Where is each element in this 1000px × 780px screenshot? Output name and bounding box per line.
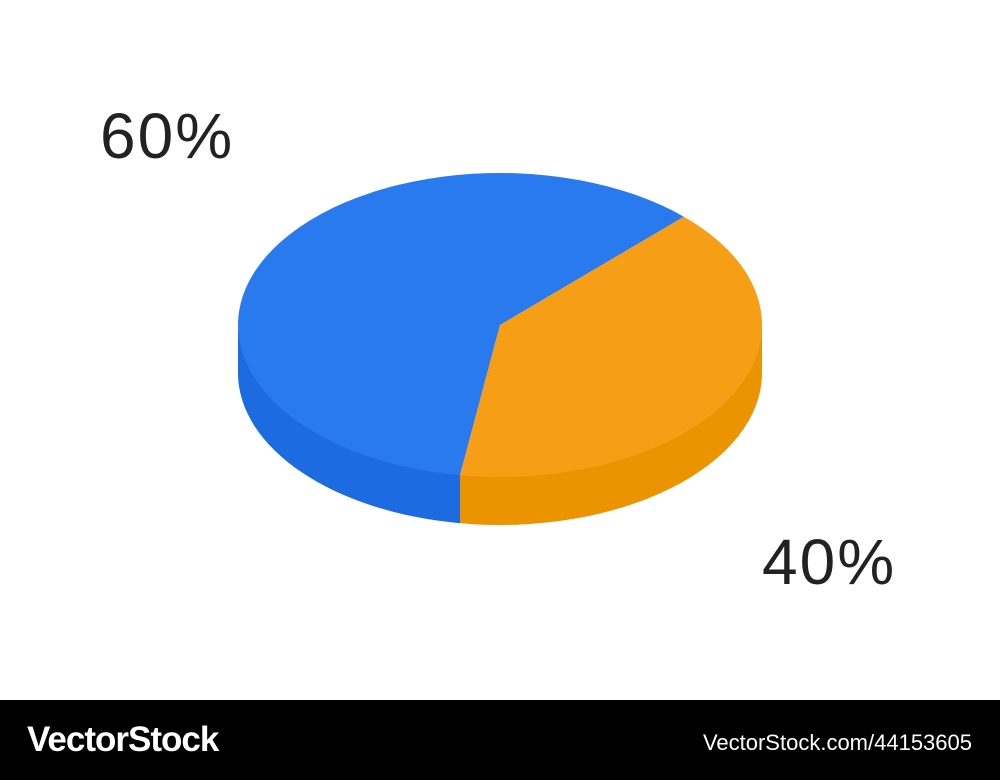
label: 60%: 60% [100, 100, 234, 172]
footer brand: VectorStock [27, 720, 218, 759]
label: 40%: 40% [762, 526, 896, 598]
blue slice 60% [238, 173, 684, 475]
orange side [460, 323, 762, 525]
orange slice 40% [460, 217, 762, 477]
footer id: VectorStock.com/44153605 [703, 730, 972, 755]
footer bar [0, 700, 1000, 780]
blue side [238, 323, 460, 523]
